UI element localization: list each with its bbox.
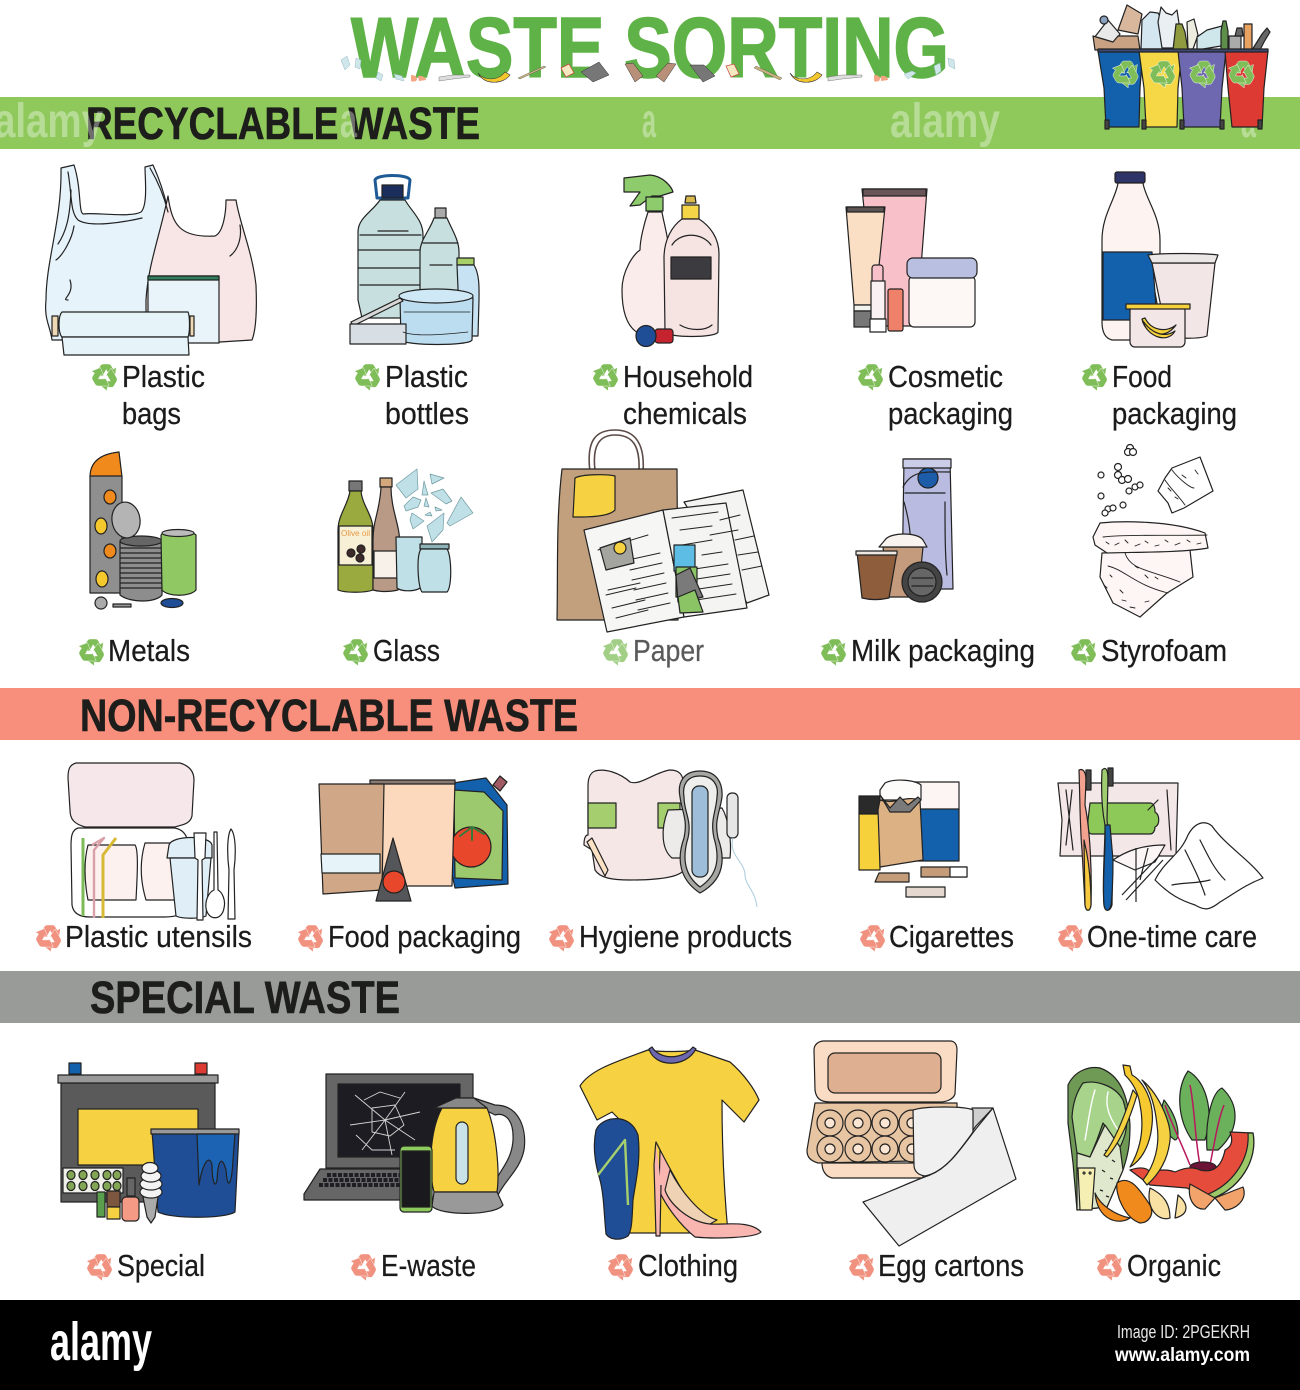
- label: food packaging: Food: [1112, 360, 1172, 394]
- illustration: paper bag and newspaper: [557, 430, 769, 632]
- band: recyclable waste: [0, 97, 1300, 149]
- watermark on green band: a: [642, 95, 656, 148]
- illustration: cigarettes and lighter: [859, 780, 967, 897]
- footer bar: Image ID: 2PGEKRH: [1117, 1322, 1250, 1342]
- footer bar: alamy: [50, 1312, 152, 1372]
- illustration: battery, paint and household items: [58, 1063, 239, 1223]
- footer bar: www.alamy.com: [1114, 1345, 1250, 1366]
- label: clothing: [604, 1249, 738, 1283]
- label: organic: Organic: [1127, 1249, 1221, 1283]
- label: food packaging: packaging: [1112, 397, 1237, 431]
- label: e-waste: E-waste: [381, 1249, 476, 1283]
- label: plastic bags: [88, 360, 205, 431]
- illustration: glass: [338, 469, 473, 592]
- illustration: e-waste: [304, 1074, 525, 1213]
- label: paper: Paper: [633, 634, 704, 668]
- label: glass: [339, 634, 440, 668]
- label: plastic utensils: Plastic utensils: [65, 920, 252, 954]
- label: plastic bottles: bottles: [385, 397, 469, 431]
- illustration: one-time care: [1058, 768, 1263, 910]
- title decoration: scattered waste: [341, 56, 955, 82]
- watermark on green band: alamy: [890, 95, 1000, 148]
- label: household chemicals: Household: [623, 360, 753, 394]
- illustration: hygiene products: [584, 770, 757, 907]
- band: non-recyclable waste: [0, 688, 1300, 740]
- label: glass: Glass: [373, 634, 440, 668]
- label: cigarettes: Cigarettes: [889, 920, 1014, 954]
- illustration: clothing: [580, 1047, 761, 1239]
- illustration: plastic utensils: [68, 763, 235, 920]
- illustration: milk packaging and coffee cups: [856, 459, 953, 602]
- footer bar: [0, 1300, 1300, 1390]
- illustration: glass: Olive oil: [341, 529, 370, 538]
- label: organic: [1093, 1249, 1221, 1283]
- label: plastic bags: Plastic: [122, 360, 205, 394]
- illustration: cosmetic packaging: [846, 189, 977, 332]
- icon: recycling bins with waste: [1093, 5, 1270, 129]
- illustration: food packaging bottle, cup and tray: [1102, 172, 1218, 347]
- heading: special waste: SPECIAL WASTE: [90, 972, 400, 1023]
- watermark on green band: [0, 95, 1256, 148]
- label: cosmetic packaging: packaging: [888, 397, 1013, 431]
- heading: non-recyclable waste: NON-RECYCLABLE WASTE: [80, 690, 578, 741]
- illustration: metals: [90, 452, 196, 609]
- watermark on green band: a: [340, 95, 357, 148]
- label: hygiene products: Hygiene products: [579, 920, 792, 954]
- illustration: food packaging pouches: [319, 776, 508, 901]
- label: clothing: Clothing: [638, 1249, 738, 1283]
- label: one-time care: One-time care: [1087, 920, 1257, 954]
- label: household chemicals: [589, 360, 753, 431]
- label: special: Special: [117, 1249, 205, 1283]
- watermark on green band: a: [1241, 95, 1256, 148]
- label: cosmetic packaging: [854, 360, 1013, 431]
- illustration: household chemicals: [622, 175, 719, 346]
- heading: recyclable waste: RECYCLABLE WASTE: [86, 98, 480, 149]
- title: WASTE SORTING: [351, 1, 949, 96]
- label: household chemicals: chemicals: [623, 397, 747, 431]
- label: food packaging: [1078, 360, 1237, 431]
- label: plastic bottles: [351, 360, 469, 431]
- illustration: egg carton and paper roll: [807, 1041, 1016, 1246]
- band: special waste: [0, 971, 1300, 1023]
- illustration: plastic bottles: [350, 176, 479, 344]
- label: e-waste: [347, 1249, 476, 1283]
- label: milk packaging: Milk packaging: [851, 634, 1035, 668]
- label: plastic bottles: Plastic: [385, 360, 468, 394]
- label: food packaging non-recyclable: Food packaging: [328, 920, 521, 954]
- illustration: organic waste: [1068, 1065, 1254, 1223]
- label: cosmetic packaging: Cosmetic: [888, 360, 1003, 394]
- label: egg cartons: Egg cartons: [878, 1249, 1024, 1283]
- label: styrofoam: Styrofoam: [1101, 634, 1227, 668]
- label: metals: [75, 634, 190, 668]
- illustration: styrofoam: [1093, 444, 1213, 617]
- label: paper: [599, 634, 704, 668]
- label: plastic bags: bags: [122, 397, 181, 431]
- label: special: [83, 1249, 205, 1283]
- label: metals: Metals: [108, 634, 190, 668]
- illustration: plastic bags: [46, 165, 256, 355]
